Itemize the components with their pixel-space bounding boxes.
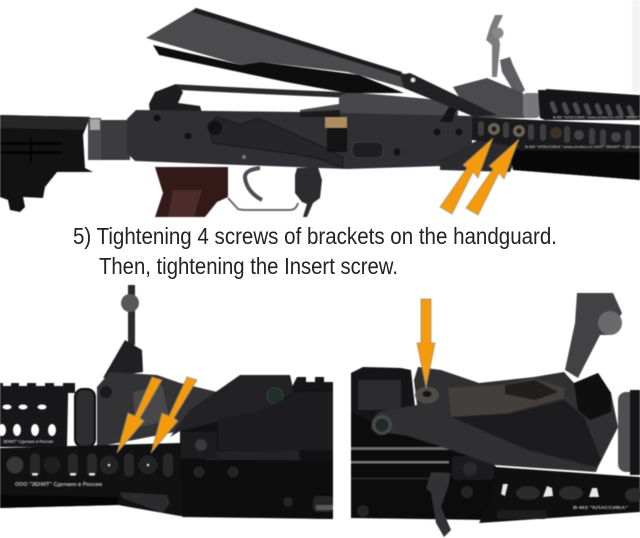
- front sight arm: [486, 15, 525, 97]
- gray lower receiver section behind arrows: [440, 140, 520, 172]
- sight arm: [565, 293, 622, 378]
- handguard with screws: ООО "ЗЕНИТ" Сделано в России: [15, 482, 102, 488]
- rear rail section: [351, 367, 415, 422]
- barrel ring and upper handguard: [618, 390, 640, 475]
- open dust cover with rail: [146, 8, 497, 117]
- sticker: [325, 117, 347, 152]
- hinge bracket: [371, 367, 618, 472]
- rear sight: [149, 84, 202, 113]
- lower handguard with screws: [472, 117, 640, 180]
- upper rail handguard: ЗЕНИТ" Сделано в России: [3, 439, 53, 444]
- receiver: [127, 110, 472, 169]
- charging lever: [440, 102, 458, 122]
- gas block: [453, 78, 526, 118]
- handguard: [479, 467, 640, 523]
- magazine catch: [295, 167, 322, 217]
- panel: bottom right photo, insert screw: [351, 293, 640, 537]
- bolt cover housing: [300, 92, 458, 120]
- trigger guard and trigger: [228, 168, 298, 210]
- arrow: screw two: [466, 139, 519, 215]
- handguard with screws: [0, 443, 180, 516]
- top rail teeth: [292, 377, 333, 390]
- hinge pivot: [267, 388, 283, 404]
- receiver: [180, 460, 333, 519]
- buffer tube: [88, 118, 130, 160]
- rear sight leaf: [103, 285, 143, 378]
- stock: [0, 115, 93, 212]
- upper rail handguard: [538, 89, 640, 120]
- gas block: [97, 372, 217, 447]
- insert screw: [415, 386, 439, 404]
- recoil spring rod: [176, 87, 347, 95]
- stamped rotating lever on receiver: [208, 117, 343, 168]
- pistol grip: [155, 167, 228, 217]
- handguard: В-МЗ "КЛАССИКА": [573, 505, 628, 510]
- cover latch lever: [426, 472, 451, 537]
- barrel ring: [523, 93, 540, 118]
- arrow: bracket screw two: [151, 377, 197, 453]
- instruction text: [73, 223, 557, 279]
- top cover: [218, 391, 333, 450]
- panel: bottom left photo, handguard screws: [0, 285, 333, 519]
- upper rail handguard: [0, 383, 75, 447]
- arrow: insert screw: [417, 299, 435, 388]
- panel: top photo, rifle with dust cover open: [0, 0, 640, 217]
- arrow: bracket screw one: [117, 377, 162, 453]
- instruction line one: 5) Tightening 4 screws of brackets on the handguard.: [73, 223, 557, 249]
- sight block: [574, 373, 611, 420]
- lower receiver cover: [351, 405, 500, 520]
- lower handguard with screws: В-МЗ "КЛАССИКА" www.zenitco.ru ООО "ЗЕНИТ" Сделано: [525, 145, 640, 149]
- barrel ring: [75, 389, 95, 447]
- upper rail handguard: В-МЗ "КЛАССИКА" www.zenitco.ru ООО "ЗЕНИТ": [553, 116, 640, 120]
- latch block: [181, 432, 217, 458]
- dark backing of rear section: [180, 385, 333, 519]
- hinge pivot: [372, 415, 392, 435]
- cavity of open block: [448, 378, 564, 417]
- instruction line two: Then, tightening the Insert screw.: [99, 253, 398, 279]
- angled block face: [451, 400, 601, 467]
- hinge bracket arm: [170, 375, 294, 437]
- cover stamping strip: [205, 450, 300, 460]
- arrow: screw one: [440, 138, 493, 214]
